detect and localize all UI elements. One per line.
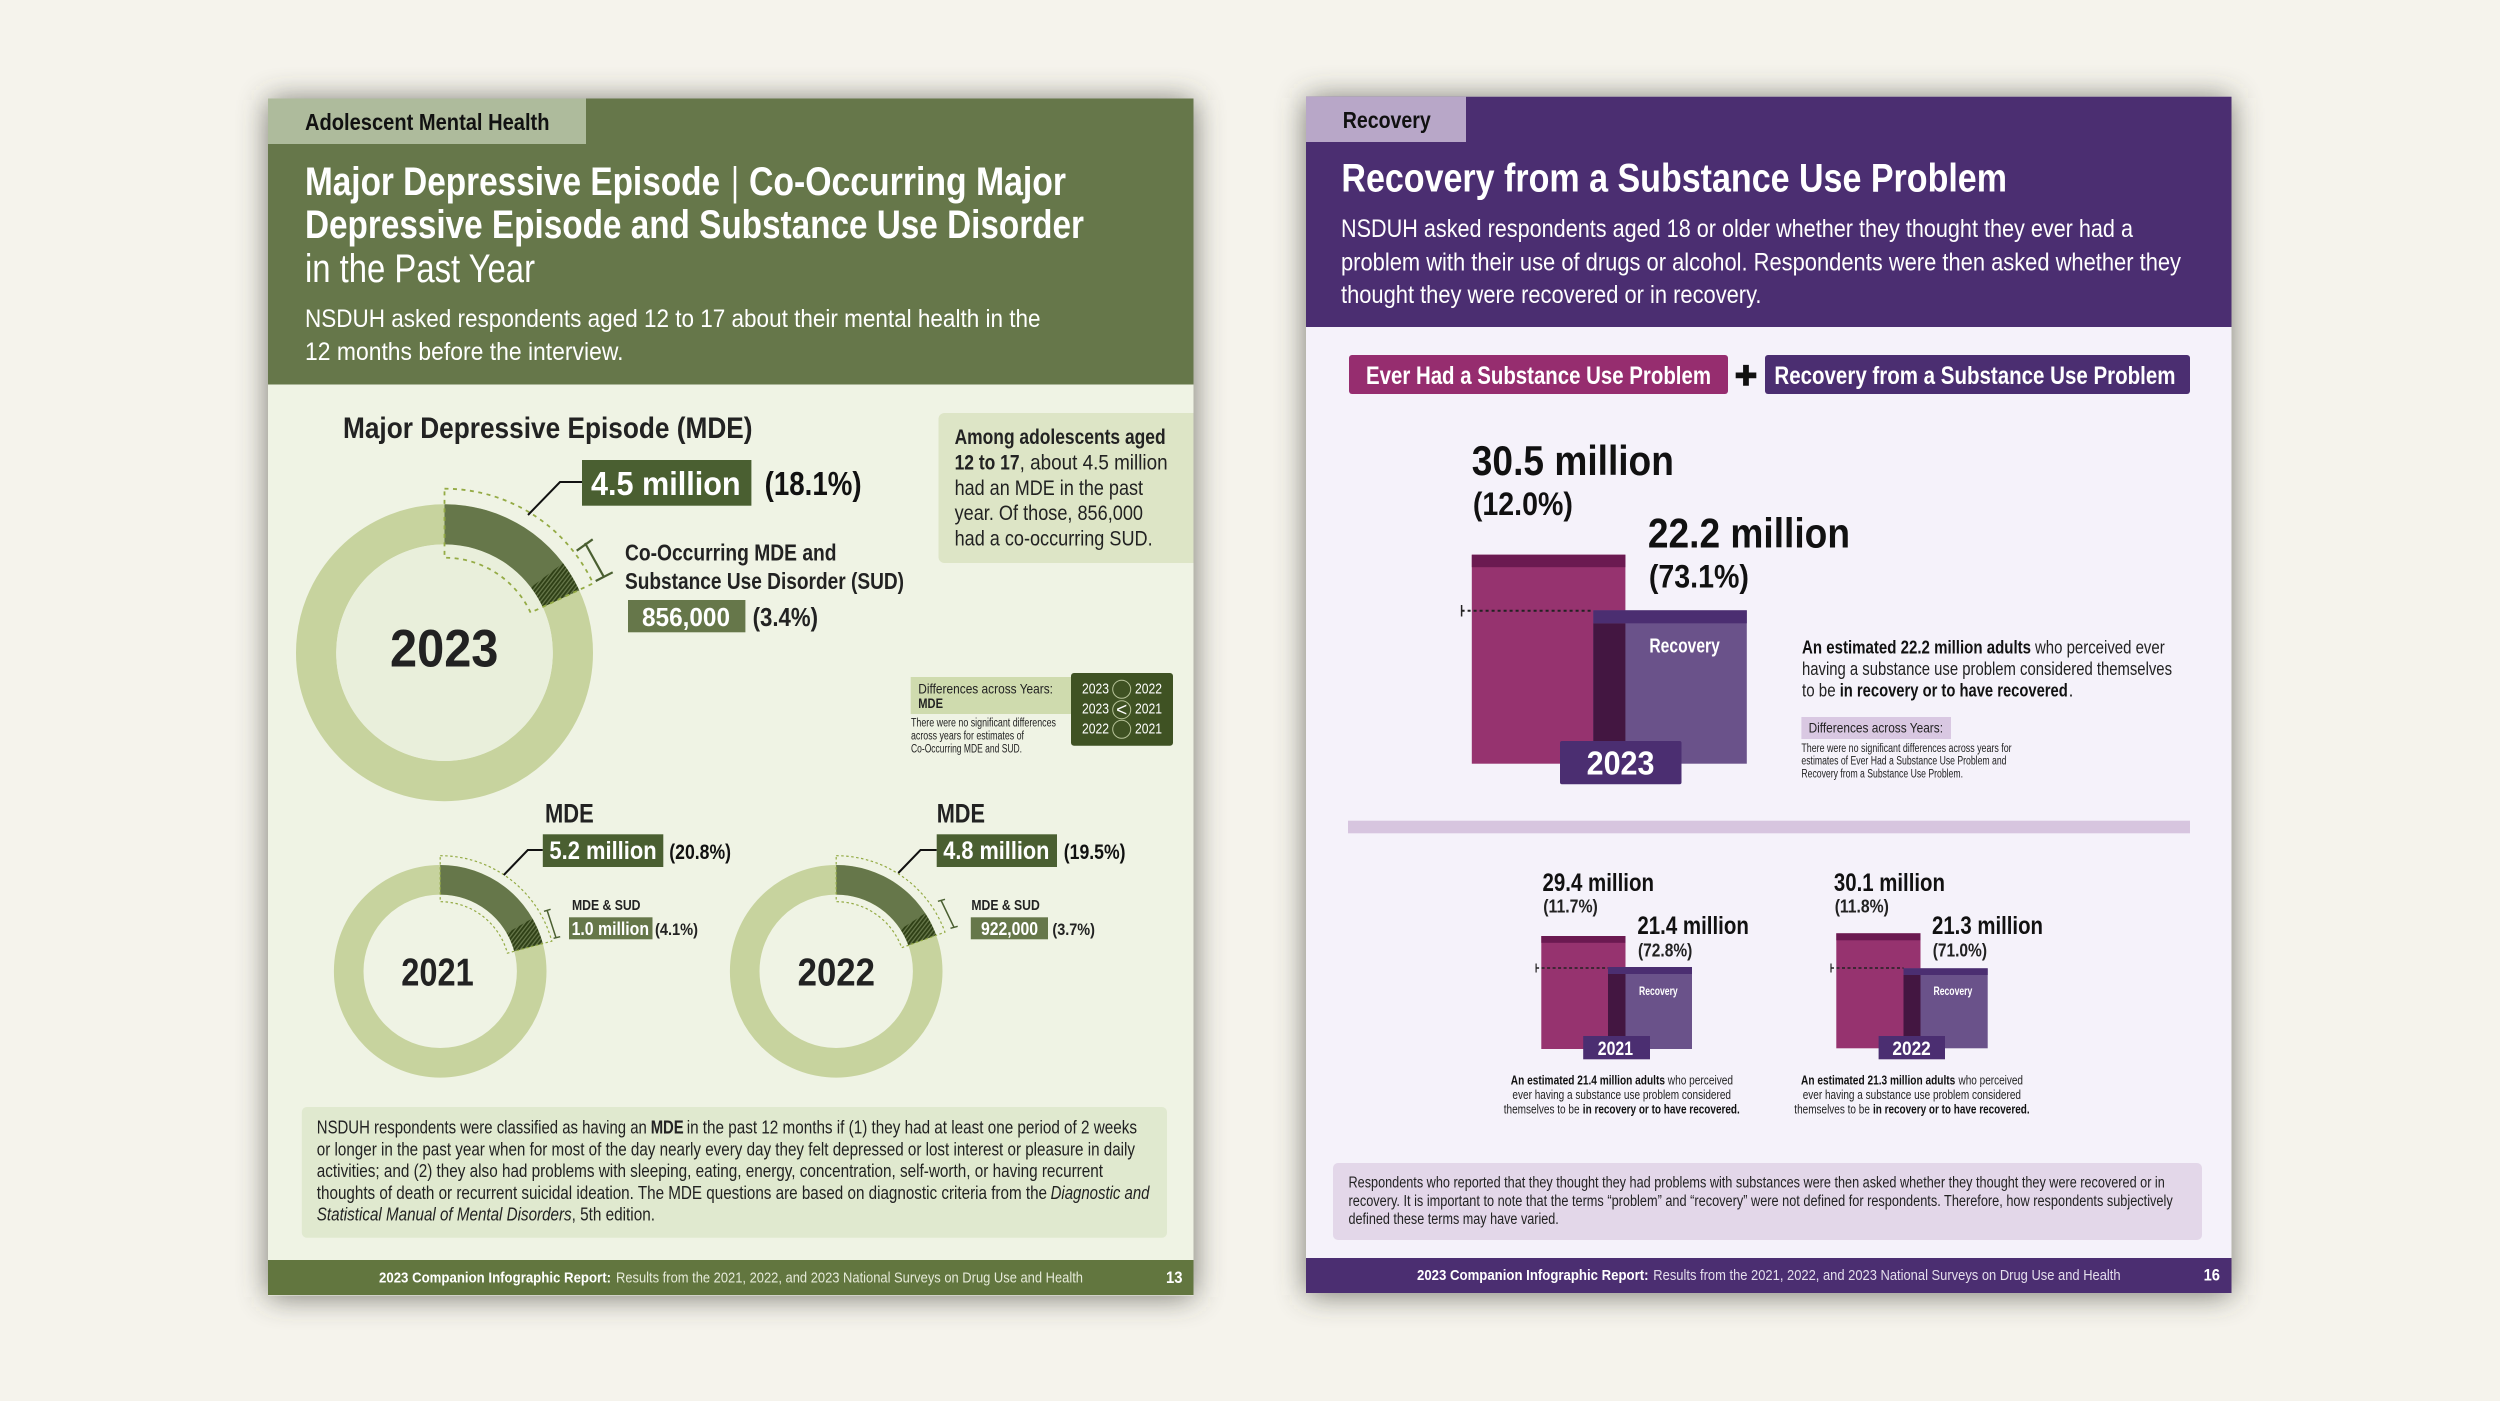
significance table: 2022 <box>1082 722 1109 738</box>
text: 2023 estimate: who perceived ever <box>2034 637 2165 657</box>
differences across years <box>1801 717 2012 780</box>
title: Depressive Episode and Substance Use Disorder <box>305 203 1084 247</box>
definition box: NSDUH respondents were classified as having an <box>317 1117 647 1137</box>
chart: 2022 recovery: (71.0%) <box>1933 941 1987 961</box>
text: 2021 estimate: ever having a substance use problem considered <box>1512 1087 1731 1102</box>
differences across years <box>911 673 1173 756</box>
callout: 2021 MDE and SUD: (4.1%) <box>655 920 698 939</box>
intro text: NSDUH asked respondents aged 18 or older whether they thought they ever had a <box>1341 215 2133 243</box>
chart: 2021 recovery: (72.8%) <box>1638 941 1692 961</box>
title: Co-Occurring Major <box>749 160 1066 204</box>
chart: 2023 recovery: 2023 <box>1587 744 1654 781</box>
chart: 2021 recovery: 21.4 million <box>1637 912 1749 940</box>
callout: 4.5 million MDE: (18.1%) <box>765 465 862 502</box>
text: 2022 estimate: who perceived <box>1958 1072 2023 1087</box>
text: 2023 estimate: to be <box>1802 680 1836 700</box>
chart: 2022 recovery: 30.1 million <box>1834 869 1945 897</box>
callout: 2022 MDE and SUD: 922,000 <box>981 919 1038 939</box>
differences across years: There were no significant differences across years for <box>1801 743 2012 755</box>
title <box>305 160 1084 291</box>
significance table: 2022 <box>1135 682 1162 698</box>
callout: summary text: had a co-occurring SUD. <box>955 528 1153 551</box>
differences across years: Co-Occurring MDE and SUD. <box>911 744 1022 756</box>
intro text <box>1341 215 2181 309</box>
footer: 16 <box>2204 1266 2220 1284</box>
chart: 2023 recovery: (12.0%) <box>1473 486 1573 522</box>
chart: 2023 recovery: 22.2 million <box>1648 510 1850 557</box>
legend pills: + <box>1735 355 1757 397</box>
legend pills <box>1349 355 2190 397</box>
significance table: 2023 <box>1082 702 1109 718</box>
callout: co-occurring MDE and SUD: Substance Use Disorder (SUD) <box>625 568 904 594</box>
definition box <box>302 1107 1167 1238</box>
text: 2022 estimate: themselves to be <box>1794 1101 1870 1116</box>
chart: 2022 recovery: (11.8%) <box>1835 896 1889 916</box>
callout: 2022 MDE and SUD: MDE & SUD <box>971 897 1040 914</box>
header band <box>1306 97 2232 327</box>
definition box: in the past 12 months if (1) they had at least one period of 2 weeks <box>687 1117 1137 1137</box>
donut chart: 2023: 2023 <box>390 620 498 679</box>
intro text: 12 months before the interview. <box>305 338 624 366</box>
text: 2023 estimate: . <box>2068 680 2074 700</box>
definition box: recovery. It is important to note that the terms “problem” and “recovery” were not defined for respondents. Therefore, how respondents subjectively <box>1348 1193 2173 1210</box>
text: 2022 estimate: in recovery or to have recovered. <box>1873 1101 2030 1116</box>
definition box: or longer in the past year when for most of the day nearly every day they felt depressed or lost interest or pleasure in daily <box>317 1139 1135 1159</box>
section tag <box>268 98 586 144</box>
callout: 2022 MDE <box>898 799 1126 873</box>
callout: summary text: Among adolescents aged <box>955 426 1166 449</box>
callout: 4.5 million MDE: 4.5 million <box>591 465 741 502</box>
differences across years: across years for estimates of <box>911 731 1025 743</box>
callout: 2021 MDE: 5.2 million <box>549 837 657 865</box>
callout: summary text: , about 4.5 million <box>1020 451 1168 474</box>
callout: 2021 MDE and SUD <box>544 897 698 939</box>
heading: major depressive episode: Major Depressive Episode (MDE) <box>343 412 752 445</box>
callout: co-occurring MDE and SUD <box>577 539 904 632</box>
text: 2023 estimate: An estimated 22.2 million adults <box>1802 637 2031 657</box>
chart: 2022 recovery: Recovery <box>1934 984 1973 998</box>
section tag <box>1306 97 1466 142</box>
chart: 2023 recovery: (73.1%) <box>1649 559 1749 595</box>
donut chart: 2022 <box>745 856 945 1063</box>
text: 2023 estimate <box>1802 637 2172 700</box>
footer <box>1306 1258 2232 1293</box>
callout: 2022 MDE: (19.5%) <box>1064 841 1126 864</box>
definition box: Diagnostic and <box>1051 1183 1150 1203</box>
callout: co-occurring MDE and SUD: Co-Occurring MDE and <box>625 540 836 566</box>
text: 2021 estimate: An estimated 21.4 million adults <box>1511 1072 1665 1087</box>
section tag: Adolescent Mental Health <box>305 109 550 135</box>
differences across years: MDE <box>918 695 943 711</box>
text: 2022 estimate: ever having a substance use problem considered <box>1803 1087 2021 1102</box>
intro text: thought they were recovered or in recovery. <box>1341 281 1762 309</box>
callout: 2021 MDE and SUD: 1.0 million <box>572 919 649 939</box>
section tag: Recovery <box>1343 107 1431 133</box>
differences across years: Recovery from a Substance Use Problem. <box>1801 768 1963 780</box>
donut chart: 2021: 2021 <box>401 952 474 995</box>
text: 2023 estimate: in recovery or to have recovered <box>1840 680 2068 700</box>
callout: 2022 MDE: MDE <box>937 799 985 829</box>
chart: 2022 recovery: 2022 <box>1892 1039 1931 1060</box>
differences across years: estimates of Ever Had a Substance Use Problem and <box>1801 756 2006 768</box>
donut chart: 2021 <box>349 856 552 1063</box>
significance table: 2021 <box>1135 702 1162 718</box>
significance table: < <box>1116 700 1127 721</box>
intro text <box>305 305 1040 366</box>
panel: recovery page <box>1306 97 2232 1295</box>
text: 2021 estimate <box>1504 1072 1740 1116</box>
chart: 2022 recovery: 21.3 million <box>1932 912 2043 940</box>
significance table <box>1071 673 1173 746</box>
callout: summary text: had an MDE in the past <box>955 477 1143 500</box>
callout: 2021 MDE: (20.8%) <box>669 841 731 864</box>
definition box: Respondents who reported that they thought they had problems with substances were then asked whether they thought they were recovered or in <box>1348 1175 2165 1192</box>
header band <box>268 98 1194 384</box>
footer: 13 <box>1166 1268 1182 1287</box>
intro text: NSDUH asked respondents aged 12 to 17 about their mental health in the <box>305 305 1040 333</box>
chart: 2021 recovery: 29.4 million <box>1542 869 1654 897</box>
text: 2021 estimate: themselves to be <box>1504 1101 1580 1116</box>
chart: 2023 recovery <box>1462 437 1850 784</box>
chart: 2022 recovery <box>1831 869 2043 1060</box>
chart: 2021 recovery: Recovery <box>1639 984 1678 998</box>
panel: adolescent mental health page <box>268 98 1194 1297</box>
footer <box>268 1260 1194 1295</box>
footer: 2023 Companion Infographic Report: <box>1417 1267 1648 1284</box>
text: 2022 estimate: An estimated 21.3 million adults <box>1801 1072 1955 1087</box>
callout: 2022 MDE: 4.8 million <box>943 837 1049 865</box>
intro text: problem with their use of drugs or alcohol. Respondents were then asked whether they <box>1341 248 2181 276</box>
chart: 2021 recovery: (11.7%) <box>1543 896 1598 916</box>
chart: 2021 recovery <box>1536 869 1749 1060</box>
text: 2021 estimate: in recovery or to have recovered. <box>1583 1101 1740 1116</box>
callout: 2022 MDE and SUD: (3.7%) <box>1052 920 1095 939</box>
footer: Results from the 2021, 2022, and 2023 National Surveys on Drug Use and Health <box>1653 1267 2121 1284</box>
title: Major Depressive Episode <box>305 160 720 204</box>
text: 2023 estimate: having a substance use problem considered themselves <box>1802 659 2172 679</box>
text: 2022 estimate <box>1794 1072 2030 1116</box>
definition box: defined these terms may have varied. <box>1348 1211 1559 1228</box>
callout: summary text: 12 to 17 <box>955 451 1020 474</box>
chart: 2023 recovery: Recovery <box>1649 635 1720 657</box>
differences across years: Differences across Years: <box>1809 719 1943 735</box>
definition box: activities; and (2) they also had problems with sleeping, eating, energy, concentration, self-worth, or having recurrent <box>317 1161 1103 1181</box>
title: | <box>731 160 739 204</box>
callout: 2021 MDE <box>504 799 731 875</box>
differences across years: There were no significant differences <box>911 718 1056 730</box>
significance table: 2021 <box>1135 722 1162 738</box>
text: 2021 estimate: who perceived <box>1667 1072 1733 1087</box>
donut chart: 2023 <box>316 489 593 781</box>
callout: 2022 MDE and SUD <box>938 897 1095 939</box>
callout: co-occurring MDE and SUD: (3.4%) <box>753 602 818 632</box>
callout: co-occurring MDE and SUD: 856,000 <box>642 602 730 632</box>
definition box: MDE <box>651 1117 684 1137</box>
differences across years: Differences across Years: <box>918 680 1053 696</box>
significance table: 2023 <box>1082 682 1109 698</box>
definition box: thoughts of death or recurrent suicidal ideation. The MDE questions are based on diagnostic criteria from the <box>317 1183 1047 1203</box>
definition box: Statistical Manual of Mental Disorders <box>317 1205 572 1225</box>
callout: 2021 MDE and SUD: MDE & SUD <box>572 897 641 914</box>
callout: summary text <box>938 413 1194 563</box>
title: in the Past Year <box>305 247 535 291</box>
callout: 4.5 million MDE <box>528 460 862 515</box>
definition box <box>1333 1163 2202 1240</box>
legend pills: Recovery from a Substance Use Problem <box>1774 362 2176 390</box>
title: Recovery from a Substance Use Problem <box>1341 157 2007 201</box>
donut chart: 2022: 2022 <box>798 952 875 995</box>
definition box: , 5th edition. <box>572 1205 655 1225</box>
callout: 2021 MDE: MDE <box>545 799 594 829</box>
chart: 2021 recovery: 2021 <box>1598 1039 1633 1060</box>
chart: 2023 recovery: 30.5 million <box>1472 437 1674 484</box>
footer: Results from the 2021, 2022, and 2023 National Surveys on Drug Use and Health <box>616 1270 1083 1287</box>
legend pills: Ever Had a Substance Use Problem <box>1366 362 1711 390</box>
footer: 2023 Companion Infographic Report: <box>379 1270 611 1287</box>
callout: summary text: year. Of those, 856,000 <box>955 502 1143 525</box>
